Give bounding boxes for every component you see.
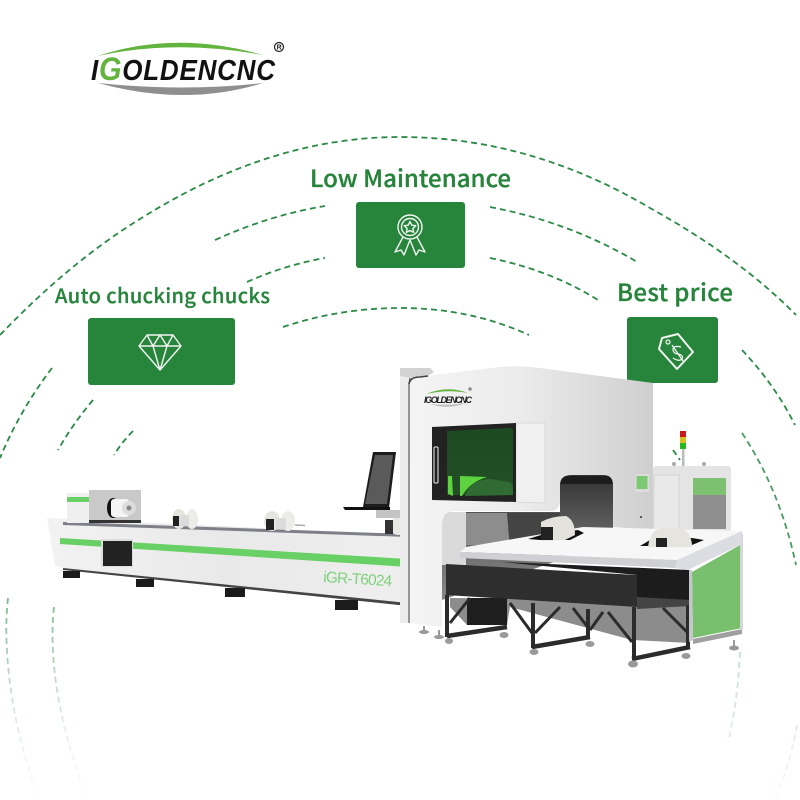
panel: low maintenance [310,159,511,268]
rollers [172,509,406,535]
steel frame legs [447,595,690,660]
heading: best price: Best price [617,273,733,308]
casters and feet [419,626,739,668]
icon: price tag [659,334,693,369]
panel: auto chucking chucks [55,280,270,385]
lower frame background [450,598,690,643]
table rollers [528,516,704,547]
logo: iGOLDENCNC [91,42,284,95]
black hopper [446,562,690,609]
icon: medal ribbon [395,215,425,255]
model label: iGR-T6024 [323,569,393,590]
heading: auto chucking chucks: Auto chucking chucks [55,280,270,309]
machine bed [47,518,408,610]
control monitor [343,452,406,518]
housing logo: IGOLDENCNC [424,395,472,405]
chuck unit [67,490,141,523]
logo: iGOLDENCNC: R [277,44,282,52]
rear column [400,368,410,623]
machine: laser tube cutter [47,366,743,668]
door window [432,423,545,503]
small display [635,474,649,518]
icon: diamond [139,335,181,370]
work table [460,527,743,644]
main housing [409,366,653,627]
housing logo [424,387,472,407]
cabinet: rear electrical [653,431,731,532]
panel: best price [617,273,733,383]
logo: iGOLDENCNC: IGOLDENCNC [91,50,276,87]
heading: low maintenance: Low Maintenance [310,159,511,194]
inner cutting bay [442,475,613,600]
